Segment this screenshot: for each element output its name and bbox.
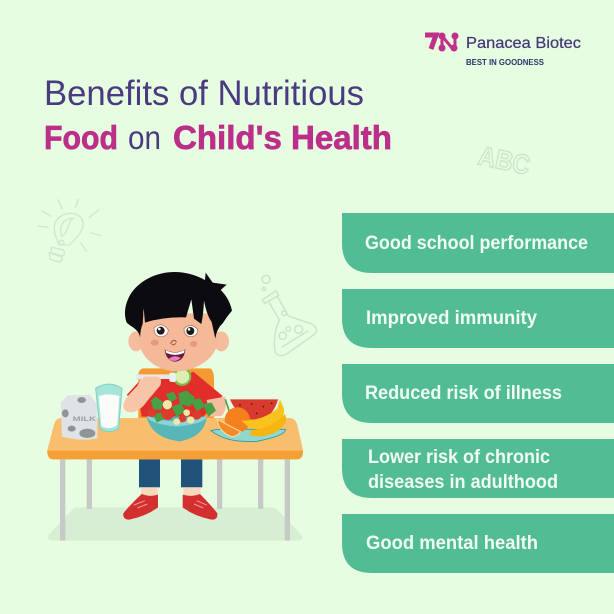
benefit: good mental health	[342, 514, 614, 573]
logo: Panacea Biotec	[425, 33, 581, 67]
table top	[47, 418, 303, 459]
milk carton	[61, 395, 97, 440]
benefit: good school performance	[342, 213, 614, 273]
fork	[136, 374, 170, 379]
orange slice	[217, 419, 241, 437]
floor shadow	[48, 507, 302, 541]
benefits list	[342, 213, 614, 573]
arms	[123, 375, 161, 412]
title line 2: Food	[44, 119, 118, 156]
chair back	[138, 368, 214, 420]
benefit: lower risk of chronic diseases in adulthood: Lower risk of chronic	[368, 447, 550, 468]
face	[139, 313, 217, 371]
cucumber	[173, 367, 191, 386]
shoes	[123, 494, 217, 520]
benefit: improved immunity	[342, 289, 614, 348]
title line 2	[44, 119, 392, 156]
t-shirt	[127, 372, 223, 417]
bananas	[241, 399, 286, 436]
hand	[142, 377, 161, 387]
title	[44, 74, 392, 156]
logo tagline: BEST IN GOODNESS	[466, 57, 544, 67]
milk glass	[96, 384, 122, 432]
table back legs	[87, 457, 263, 509]
salad bowl	[147, 391, 216, 441]
mouth	[165, 349, 185, 362]
logo wordmark: Panacea Biotec	[466, 35, 581, 52]
benefit: lower risk of chronic diseases in adulthood	[342, 439, 614, 498]
icon: logo mark	[425, 33, 458, 51]
benefit: lower risk of chronic diseases in adulthood: diseases in adulthood	[368, 472, 558, 493]
eyes	[154, 325, 198, 337]
benefit: good mental health: Good mental health	[366, 533, 538, 554]
icon: ABC doodle: ABC	[476, 141, 533, 181]
front legs	[60, 459, 290, 541]
illustration: boy at table with healthy food	[47, 272, 303, 541]
boy legs	[139, 457, 202, 487]
ears	[128, 331, 144, 351]
benefit: improved immunity: Improved immunity	[366, 308, 537, 329]
icon: light bulb doodle	[37, 199, 101, 262]
benefit: reduced risk of illness: Reduced risk of illness	[365, 383, 562, 404]
cheeks and nose	[151, 340, 159, 346]
hair	[125, 272, 232, 339]
title line 2: on	[128, 119, 161, 156]
benefit: good school performance: Good school performance	[365, 233, 588, 254]
orange fruit	[225, 399, 229, 412]
title line 1: Benefits of Nutritious	[44, 74, 364, 113]
watermelon	[230, 399, 278, 421]
benefit: reduced risk of illness	[342, 364, 614, 423]
milk label: MILK	[73, 416, 96, 423]
plate	[211, 429, 286, 442]
title line 2: Child's Health	[173, 119, 392, 156]
icon: flask doodle	[262, 275, 317, 356]
